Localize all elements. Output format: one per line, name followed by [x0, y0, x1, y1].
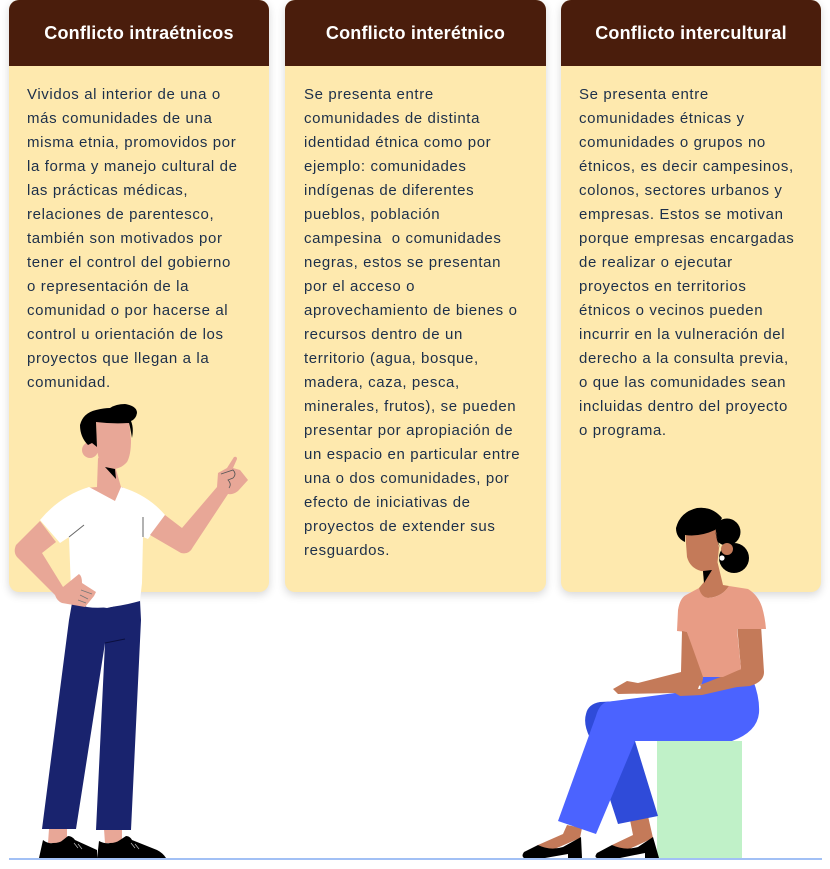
text block: conflicto intercultural: étnicos o vecinos pueden: [579, 302, 763, 319]
text block: conflicto intraétnicos: control u orientación de los: [27, 326, 224, 343]
icon: seated woman: [522, 508, 766, 858]
text block: conflicto interétnico: territorio (agua, bosque,: [304, 350, 479, 367]
text block: conflicto interétnico: madera, caza, pesca,: [304, 374, 460, 391]
text block: conflicto interétnico: minerales, frutos), se pueden: [304, 398, 516, 415]
heading: conflicto intraétnicos: Conflicto intraétnicos: [44, 23, 234, 43]
icon: standing man pointing: [15, 404, 248, 858]
heading: conflicto interétnico: [285, 0, 546, 66]
text block: conflicto interétnico: Se presenta entre: [304, 86, 434, 103]
panel: conflicto intraétnicos: [9, 0, 269, 592]
ground line: [9, 858, 822, 860]
text block: conflicto interétnico: campesina o comunidades: [304, 230, 502, 247]
heading: conflicto intercultural: [561, 0, 821, 66]
text block: conflicto interétnico: identidad étnica como por: [304, 134, 491, 151]
heading: conflicto intercultural: Conflicto intercultural: [595, 23, 787, 43]
text block: conflicto interétnico: por el acceso o: [304, 278, 415, 295]
text block: conflicto intraétnicos: las prácticas médicas,: [27, 182, 188, 199]
text block: conflicto intercultural: [579, 86, 794, 439]
text block: conflicto intercultural: Se presenta entre: [579, 86, 709, 103]
text block: conflicto intercultural: incurrir en la vulneración del: [579, 326, 785, 343]
text block: conflicto intraétnicos: también son motivados por: [27, 230, 223, 247]
text block: conflicto intercultural: colonos, sectores urbanos y: [579, 182, 783, 199]
text block: conflicto interétnico: recursos dentro de un: [304, 326, 463, 343]
text block: conflicto intraétnicos: Vividos al interior de una o: [27, 86, 221, 103]
text block: conflicto interétnico: un espacio en particular entre: [304, 446, 520, 463]
text block: conflicto interétnico: efecto de iniciativas de: [304, 494, 471, 511]
text block: conflicto intercultural: o programa.: [579, 422, 667, 439]
text block: conflicto intraétnicos: misma etnia, promovidos por: [27, 134, 236, 151]
text block: conflicto intraétnicos: la forma y manejo cultural de: [27, 158, 238, 175]
text block: conflicto intercultural: étnicos, es decir campesinos,: [579, 158, 794, 175]
text block: conflicto interétnico: pueblos, población: [304, 206, 440, 223]
text block: conflicto intercultural: comunidades étnicas y: [579, 110, 745, 127]
panel: conflicto intercultural: [561, 0, 821, 592]
text block: conflicto interétnico: indígenas de diferentes: [304, 182, 474, 199]
heading: conflicto interétnico: Conflicto interétnico: [326, 23, 505, 43]
text block: conflicto interétnico: aprovechamiento de bienes o: [304, 302, 518, 319]
text block: conflicto intraétnicos: más comunidades de una: [27, 110, 212, 127]
panel: conflicto interétnico: [285, 0, 546, 592]
text block: conflicto interétnico: proyectos de extender sus: [304, 518, 495, 535]
text block: conflicto intraétnicos: comunidad o por hacerse al: [27, 302, 228, 319]
text block: conflicto intraétnicos: proyectos que llegan a la: [27, 350, 209, 367]
text block: conflicto intraétnicos: comunidad.: [27, 374, 111, 391]
text block: conflicto intercultural: derecho a la consulta previa,: [579, 350, 789, 367]
text block: conflicto intraétnicos: tener el control del gobierno: [27, 254, 231, 271]
text block: conflicto interétnico: [304, 86, 520, 559]
text block: conflicto intercultural: o que las comunidades sean: [579, 374, 786, 391]
text block: conflicto interétnico: comunidades de distinta: [304, 110, 480, 127]
text block: conflicto interétnico: presentar por apropiación de: [304, 422, 513, 439]
text block: conflicto intercultural: comunidades o grupos no: [579, 134, 766, 151]
text block: conflicto interétnico: una o dos comunidades, por: [304, 470, 509, 487]
text block: conflicto interétnico: resguardos.: [304, 542, 390, 559]
text block: conflicto interétnico: ejemplo: comunidades: [304, 158, 466, 175]
text block: conflicto intercultural: incluidas dentro del proyecto: [579, 398, 788, 415]
text block: conflicto intercultural: de realizar o ejecutar: [579, 254, 733, 271]
text block: conflicto intraétnicos: [27, 86, 238, 391]
text block: conflicto intercultural: porque empresas encargadas: [579, 230, 794, 247]
text block: conflicto interétnico: negras, estos se presentan: [304, 254, 501, 271]
text block: conflicto intraétnicos: relaciones de parentesco,: [27, 206, 214, 223]
heading: conflicto intraétnicos: [9, 0, 269, 66]
icon: seat: [657, 741, 742, 859]
text block: conflicto intercultural: proyectos en territorios: [579, 278, 746, 295]
text block: conflicto intraétnicos: o representación de la: [27, 278, 189, 295]
text block: conflicto intercultural: empresas. Estos se motivan: [579, 206, 784, 223]
